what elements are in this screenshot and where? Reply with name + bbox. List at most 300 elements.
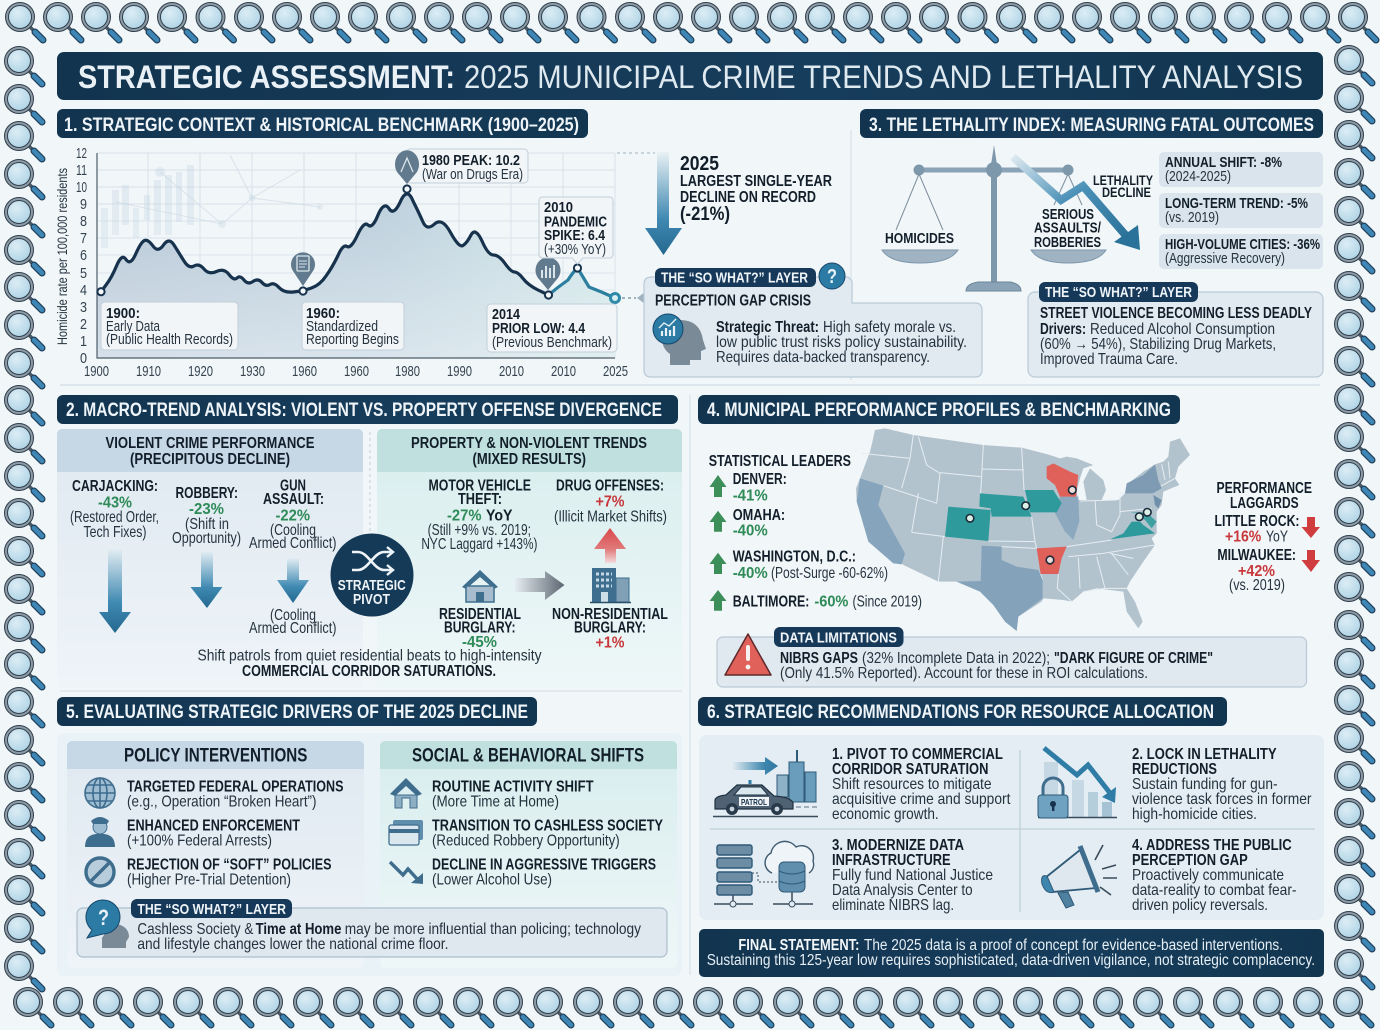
row: aggressive triggers: (Lower Alcohol Use) <box>432 872 552 888</box>
text: cashless insight: may be more influential than policing; technology <box>345 921 641 938</box>
icon: patrol car and city: PATROL <box>741 797 767 807</box>
robbery stat: Opportunity) <box>172 530 241 547</box>
panel: social and behavioral shifts: SOCIAL & BEHAVIORAL SHIFTS <box>412 744 644 766</box>
y-axis ticks: 10 <box>76 179 87 196</box>
motor vehicle theft stat: MOTOR VEHICLE <box>428 478 531 494</box>
heading: section 4 <box>698 395 1180 424</box>
y-axis ticks: 5 <box>80 265 87 282</box>
recommendation 4: driven policy reversals. <box>1132 897 1268 914</box>
pivot conclusion text: Shift patrols from quiet residential beats to high-intensity <box>198 648 542 664</box>
leader: Baltimore: (Since 2019) <box>852 594 922 610</box>
panel: property and non-violent trends: PROPERTY & NON-VIOLENT TRENDS <box>411 435 647 452</box>
non-residential burglary stat: +1% <box>596 634 624 652</box>
row: routine activity shift <box>390 778 594 810</box>
heading: section 1 <box>57 109 588 138</box>
carjacking stat: (Restored Order, <box>70 509 159 526</box>
callout: 1900: (Public Health Records) <box>106 332 233 348</box>
text: strategic threat: Requires data-backed transparency. <box>716 349 930 366</box>
text: strategic threat: High safety morale vs. <box>823 319 956 336</box>
text: cashless insight <box>137 921 641 953</box>
icon: head with question bubble: ? <box>98 905 109 930</box>
row: enhanced enforcement <box>85 817 300 850</box>
icon: 1960 report pin <box>291 252 315 286</box>
performance laggards list: LAGGARDS <box>1230 495 1299 512</box>
y-axis ticks: 12 <box>76 145 87 162</box>
section 2: macro-trend analysis <box>57 395 682 688</box>
heading: section 3 <box>860 109 1323 138</box>
laggard: Little Rock <box>1214 513 1320 546</box>
map: United States <box>856 428 1190 631</box>
section 3: lethality index <box>860 109 1323 377</box>
strategic pivot badge: PIVOT <box>353 591 390 608</box>
recommendation 2 <box>1038 746 1312 823</box>
performance laggards list <box>1214 480 1320 594</box>
callout: largest single-year decline: DECLINE ON RECORD <box>680 189 816 206</box>
scale labels: DECLINE <box>1102 185 1151 200</box>
residential burglary stat: -45% <box>462 634 497 651</box>
row: routine activity shift: ROUTINE ACTIVITY SHIFT <box>432 778 594 796</box>
callout: pandemic spike: SPIKE: 6.4 <box>544 228 605 244</box>
motor vehicle theft stat: THEFT: <box>458 491 502 508</box>
carjacking stat <box>70 478 159 541</box>
stat card: annual shift: (2024-2025) <box>1165 169 1231 185</box>
heading: perception gap crisis: PERCEPTION GAP CRISIS <box>655 292 811 310</box>
text: strategic threat <box>716 319 967 366</box>
panel: property and non-violent trends: (MIXED RESULTS) <box>472 451 586 468</box>
heading: section 2: 2. MACRO-TREND ANALYSIS: VIOLENT VS. PROPERTY OFFENSE DIVERGENCE <box>66 399 662 421</box>
final statement banner: Sustaining this 125-year low requires sophisticated, data-driven vigilance, not strategic complacency. <box>707 952 1315 969</box>
historical trend line <box>101 194 548 295</box>
panel: policy interventions <box>67 741 364 968</box>
text: NIBRS gaps: (32% Incomplete Data in 2022); <box>862 650 1050 667</box>
robbery stat <box>172 485 241 547</box>
callout: 1960: 1960: <box>306 306 340 322</box>
performance laggards list: PERFORMANCE <box>1216 480 1312 497</box>
recommendation 3 <box>714 837 993 914</box>
section dividers <box>60 130 1320 975</box>
text: drivers: Drivers: <box>1040 321 1086 338</box>
callout: 1960: Standardized <box>306 319 378 335</box>
recommendation 3: Fully fund National Justice <box>832 867 993 884</box>
stat card: high-volume cities <box>1159 234 1323 269</box>
final statement banner: The 2025 data is a proof of concept for evidence-based interventions. <box>864 937 1283 954</box>
recommendation 4: Proactively communicate <box>1132 867 1284 884</box>
recommendation 1: economic growth. <box>832 806 939 823</box>
tag: so what layer: THE “SO WHAT?” LAYER <box>137 901 286 918</box>
leader: Washington DC <box>710 548 888 582</box>
row: cashless society <box>389 818 663 850</box>
recent trend line <box>548 268 615 298</box>
row: routine activity shift: (More Time at Home) <box>432 794 559 810</box>
x-axis ticks: 2010 <box>551 363 576 380</box>
axes <box>97 153 615 358</box>
text: cashless insight: Cashless Society & <box>137 921 254 938</box>
callout: 1900 <box>101 302 238 350</box>
robbery stat: ROBBERY: <box>176 485 238 502</box>
section 5: evaluating strategic drivers <box>57 697 682 976</box>
callout: pandemic spike: (+30% YoY) <box>544 242 606 258</box>
callout: 1980 peak: 1980 PEAK: 10.2 <box>422 153 520 169</box>
scale labels: HOMICIDES <box>885 231 954 247</box>
recommendation 2: 2. LOCK IN LETHALITY <box>1132 746 1277 763</box>
gun assault note: Armed Conflict) <box>249 620 336 637</box>
recommendation 3: INFRASTRUCTURE <box>832 852 951 869</box>
gun assault stat: (Cooling <box>270 522 316 539</box>
map state: New York <box>1125 464 1162 493</box>
callout: pandemic spike: PANDEMIC <box>544 214 607 230</box>
y-axis ticks: 4 <box>80 282 87 299</box>
scale labels: SERIOUS <box>1042 207 1094 223</box>
panel: so-what perception gap <box>644 263 982 377</box>
row: targeted federal operations <box>85 778 344 810</box>
map state: Arkansas <box>1037 547 1067 574</box>
recommendation 3: 3. MODERNIZE DATA <box>832 837 964 854</box>
callout: largest single-year decline <box>680 153 832 225</box>
y-axis ticks: 9 <box>80 196 87 213</box>
row: rejection of soft policies <box>86 856 332 888</box>
laggard: Little Rock: +16% <box>1225 528 1261 546</box>
x-axis ticks: 1980 <box>395 363 420 380</box>
section 6: strategic recommendations <box>698 697 1324 977</box>
recommendation 4: data-reality to combat fear- <box>1132 882 1296 899</box>
x-axis ticks: 1910 <box>136 363 161 380</box>
drug offenses stat <box>554 478 667 526</box>
callout: 1960 <box>302 302 404 350</box>
leader: Omaha: OMAHA: <box>733 507 785 524</box>
stat card: long-term trend: (vs. 2019) <box>1165 210 1219 226</box>
panel: data limitations <box>717 627 1306 687</box>
y-axis ticks <box>76 145 87 367</box>
y-axis ticks: 7 <box>80 230 87 247</box>
stat card: long-term trend: LONG-TERM TREND: -5% <box>1165 195 1308 212</box>
row: enhanced enforcement: ENHANCED ENFORCEMENT <box>127 818 300 834</box>
gun assault stat: GUN <box>280 478 306 494</box>
x-axis ticks: 1960 <box>292 363 317 380</box>
map state: Nebraska <box>979 493 1032 517</box>
stat card: annual shift: ANNUAL SHIFT: -8% <box>1165 154 1282 171</box>
recommendation 1: CORRIDOR SATURATION <box>832 761 988 778</box>
panel: social and behavioral shifts <box>380 741 677 968</box>
drug offenses stat: DRUG OFFENSES: <box>556 478 664 494</box>
heading: section 6 <box>698 697 1227 726</box>
gun assault note <box>249 607 336 637</box>
x-axis ticks: 1990 <box>447 363 472 380</box>
non-residential burglary stat: BURGLARY: <box>574 620 646 636</box>
motor vehicle theft stat <box>421 478 537 553</box>
leader: Washington DC: WASHINGTON, D.C.: <box>733 548 856 566</box>
icon: padlock and decline chart <box>1038 748 1117 818</box>
callout: largest single-year decline: (-21%) <box>680 204 730 225</box>
row: cashless society: (Reduced Robbery Opportunity) <box>432 832 620 850</box>
row: aggressive triggers: DECLINE IN AGGRESSIVE TRIGGERS <box>432 856 656 874</box>
heading: section 4: 4. MUNICIPAL PERFORMANCE PROFILES & BENCHMARKING <box>707 399 1171 421</box>
line chart: homicide rate 1900–2025 <box>54 145 628 380</box>
arrow: drug offenses increase <box>594 528 626 563</box>
map state: California <box>857 478 905 564</box>
icon: balance scale <box>882 145 1106 291</box>
gun assault stat <box>249 478 336 552</box>
recommendation 3: eliminate NIBRS lag. <box>832 897 954 914</box>
text: drivers: Reduced Alcohol Consumption <box>1090 321 1275 338</box>
arrow: residential to non-residential <box>515 571 564 600</box>
callout: 1980 peak <box>406 149 528 183</box>
x-axis ticks: 1900 <box>84 363 109 380</box>
pivot conclusion text: COMMERCIAL CORRIDOR SATURATIONS. <box>242 663 496 680</box>
tag: so what layer: THE “SO WHAT?” LAYER <box>1045 284 1192 301</box>
carjacking stat: CARJACKING: <box>72 478 158 495</box>
icon: payment cards <box>389 820 423 845</box>
recommendation 4 <box>1042 837 1296 914</box>
y-axis ticks: 3 <box>80 299 87 316</box>
text: drivers <box>1040 305 1312 368</box>
recommendation 4: PERCEPTION GAP <box>1132 852 1248 869</box>
panel: policy interventions: POLICY INTERVENTIONS <box>124 744 307 766</box>
residential burglary stat <box>439 606 521 651</box>
residential burglary stat: RESIDENTIAL <box>439 606 521 623</box>
y-axis ticks: 0 <box>80 350 87 367</box>
final statement banner <box>699 929 1324 977</box>
recommendation 4: 4. ADDRESS THE PUBLIC <box>1132 837 1292 854</box>
text: cashless insight: and lifestyle changes lower the national crime floor. <box>137 936 448 953</box>
stat card: high-volume cities: (Aggressive Recovery) <box>1165 251 1285 267</box>
leader: Washington DC: (Post-Surge -60-62%) <box>771 565 888 582</box>
y-axis ticks: 6 <box>80 247 87 264</box>
map pins <box>966 486 1151 564</box>
icon: warning triangle <box>725 634 771 675</box>
icon: 1980 peak pin <box>395 150 419 184</box>
leader: Omaha <box>710 507 785 540</box>
text: NIBRS gaps <box>780 650 1213 682</box>
connector: chart end to perception gap <box>617 153 655 304</box>
statistical leaders list <box>709 453 922 611</box>
drug offenses stat: (Illicit Market Shifts) <box>554 508 667 526</box>
leader: Baltimore: BALTIMORE: <box>733 594 809 610</box>
icon: decline arrow <box>390 862 423 884</box>
row: rejection of soft policies: (Higher Pre-Trial Detention) <box>127 872 291 888</box>
map state: Colorado <box>945 507 991 541</box>
callout: 2014 prior low: 2014 <box>492 307 520 323</box>
stat card: high-volume cities: HIGH-VOLUME CITIES: -36% <box>1165 236 1320 253</box>
statistical leaders list: STATISTICAL LEADERS <box>709 453 851 470</box>
scale labels <box>885 173 1153 251</box>
x-axis ticks <box>84 363 628 380</box>
heading: section 5: 5. EVALUATING STRATEGIC DRIVERS OF THE 2025 DECLINE <box>66 701 528 723</box>
dashed divider <box>369 432 371 535</box>
recommendation 3: Data Analysis Center to <box>832 882 973 899</box>
callout: 1980 peak: (War on Drugs Era) <box>422 167 523 183</box>
scale labels: ASSAULTS/ <box>1034 220 1101 236</box>
text: NIBRS gaps: NIBRS GAPS <box>780 650 858 667</box>
panel: violent crime performance: VIOLENT CRIME PERFORMANCE <box>106 435 315 452</box>
panel: so-what street violence <box>1028 282 1323 377</box>
motor vehicle theft stat: (Still +9% vs. 2019; <box>428 522 531 539</box>
icon: question bubble <box>819 263 845 289</box>
tag: data limitations: DATA LIMITATIONS <box>780 630 897 646</box>
robbery stat: (Shift in <box>185 516 229 533</box>
stat card: long-term trend <box>1159 193 1323 228</box>
laggard: Milwaukee <box>1217 547 1320 594</box>
scale labels: ROBBERIES <box>1034 235 1101 251</box>
map state: Wisconsin <box>1047 463 1078 497</box>
x-axis ticks: 2010 <box>499 363 524 380</box>
map state: Texas <box>957 546 1043 631</box>
motor vehicle theft stat: -27% <box>447 508 482 524</box>
panel: property and non-violent trends <box>377 429 682 688</box>
map state: Iowa <box>1025 490 1062 512</box>
motor vehicle theft stat: YoY <box>486 508 513 524</box>
text: cashless insight: Time at Home <box>256 921 341 938</box>
data point markers <box>97 185 619 302</box>
gun assault note: (Cooling <box>270 607 316 624</box>
recommendation 1: Shift resources to mitigate <box>832 776 992 793</box>
text: NIBRS gaps: "DARK FIGURE OF CRIME" <box>1054 650 1213 667</box>
recommendation 2: high-homicide cities. <box>1132 806 1257 823</box>
recommendation 1: 1. PIVOT TO COMMERCIAL <box>832 746 1003 763</box>
stat card: annual shift <box>1159 152 1323 187</box>
heading: section 6: 6. STRATEGIC RECOMMENDATIONS FOR RESOURCE ALLOCATION <box>707 701 1214 723</box>
recommendation 1 <box>713 746 1011 823</box>
tag: so what layer: THE “SO WHAT?” LAYER <box>661 270 808 286</box>
recommendation 2: Sustain funding for gun- <box>1132 776 1278 793</box>
map state: Illinois <box>1055 497 1079 540</box>
map state: New Jersey <box>1153 495 1162 508</box>
map state: Virginia <box>1110 522 1155 539</box>
text: strategic threat: low public trust risks policy sustainability. <box>716 334 967 351</box>
text: drivers: Improved Trauma Care. <box>1040 351 1178 368</box>
final statement banner: FINAL STATEMENT: <box>738 937 859 954</box>
icon: globe <box>85 778 115 808</box>
x-axis ticks: 2025 <box>603 363 628 380</box>
x-axis ticks: 1920 <box>188 363 213 380</box>
callout: pandemic spike: 2010 <box>544 200 573 216</box>
drug offenses stat: +7% <box>596 494 624 510</box>
icon: megaphone <box>1042 845 1117 908</box>
arrow: robbery decline <box>190 550 222 608</box>
laggard: Milwaukee: MILWAUKEE: <box>1217 547 1296 564</box>
icon: house <box>462 570 498 602</box>
heading: section 1: 1. STRATEGIC CONTEXT & HISTORICAL BENCHMARK (1900–2025) <box>64 114 579 136</box>
heading: section 2 <box>57 395 678 424</box>
map state: Maryland <box>1130 512 1157 528</box>
recommendation 2: violence task forces in former <box>1132 791 1312 808</box>
carjacking stat: -43% <box>98 494 132 512</box>
callout: 2014 prior low <box>487 304 617 352</box>
gun assault stat: -22% <box>276 508 310 524</box>
icon: head with question bubble <box>86 900 129 948</box>
row: enhanced enforcement: (+100% Federal Arrests) <box>127 832 272 850</box>
laggard: Little Rock: YoY <box>1266 528 1288 546</box>
callout: 1960: Reporting Begins <box>306 332 399 348</box>
row: targeted federal operations: TARGETED FEDERAL OPERATIONS <box>127 778 344 796</box>
section 1: strategic context and historical benchmark <box>54 109 982 380</box>
panel: violent crime performance <box>57 429 363 688</box>
robbery stat: -23% <box>189 501 224 518</box>
callout: largest single-year decline: 2025 <box>680 153 719 175</box>
gun assault stat: Armed Conflict) <box>249 535 336 552</box>
leader: Denver: -41% <box>733 488 768 504</box>
text: NIBRS gaps: (Only 41.5% Reported). Account for these in ROI calculations. <box>780 665 1148 682</box>
y-axis ticks: 11 <box>76 162 87 179</box>
scale labels: LETHALITY <box>1093 173 1153 188</box>
pivot conclusion text <box>198 648 542 680</box>
carjacking stat: Tech Fixes) <box>84 524 146 541</box>
section 5 background panel <box>57 733 682 976</box>
text: drivers: (60% → 54%), Stabilizing Drug Markets, <box>1040 336 1276 353</box>
grid dividers <box>710 750 1315 912</box>
icon: prohibition sign <box>86 858 114 886</box>
laggard: Milwaukee: (vs. 2019) <box>1229 577 1285 594</box>
panel: recommendations grid <box>699 735 1324 920</box>
arrow: carjacking decline <box>99 547 131 633</box>
panel: violent crime performance: (PRECIPITOUS DECLINE) <box>130 451 290 468</box>
heading: section 5 <box>57 697 537 726</box>
callout: pandemic spike <box>539 197 613 264</box>
residential burglary stat: BURGLARY: <box>444 620 516 636</box>
callout: 1900: 1900: <box>106 306 140 322</box>
panel: so-what policing insight <box>77 899 667 957</box>
recommendation 2: REDUCTIONS <box>1132 761 1217 778</box>
row: aggressive triggers <box>390 856 656 888</box>
y-axis ticks: 8 <box>80 213 87 230</box>
x-axis ticks: 1960 <box>344 363 369 380</box>
row: cashless society: TRANSITION TO CASHLESS SOCIETY <box>432 818 663 834</box>
text: strategic threat: Strategic Threat: <box>716 319 819 336</box>
arrow: lethality decline <box>1013 157 1140 250</box>
motor vehicle theft stat: NYC Laggard +143%) <box>421 536 537 553</box>
title banner: STRATEGIC ASSESSMENT: <box>78 59 455 95</box>
laggard: Little Rock: LITTLE ROCK: <box>1214 513 1300 530</box>
leader: Washington DC: -40% <box>733 565 768 582</box>
arrow: gun assault decline <box>277 557 309 603</box>
icon: question bubble: ? <box>827 266 837 288</box>
icon: officer <box>85 817 115 847</box>
laggard: Milwaukee: +42% <box>1238 563 1275 580</box>
leader: Denver <box>710 471 787 504</box>
title banner <box>57 52 1323 100</box>
icon: servers and cloud database <box>714 841 814 907</box>
y-axis ticks: 2 <box>80 316 87 333</box>
leader: Omaha: -40% <box>733 522 768 540</box>
row: rejection of soft policies: REJECTION OF “SOFT” POLICIES <box>127 856 332 874</box>
y-axis ticks: 1 <box>80 333 87 350</box>
area under curve <box>97 194 615 358</box>
x-axis ticks: 1930 <box>240 363 265 380</box>
y-axis title: Homicide rate per 100,000 residents <box>54 168 70 345</box>
callout: 1900: Early Data <box>106 319 161 335</box>
leader: Baltimore: -60% <box>814 594 848 610</box>
callout: 2014 prior low: PRIOR LOW: 4.4 <box>492 321 585 337</box>
non-residential burglary stat: NON-RESIDENTIAL <box>552 606 668 623</box>
icon: head with chart bubble <box>653 314 706 365</box>
leader: Denver: DENVER: <box>733 471 787 488</box>
leader: Baltimore <box>710 590 922 611</box>
gun assault stat: ASSAULT: <box>263 491 324 508</box>
icon: home <box>390 778 422 808</box>
strategic pivot badge <box>330 534 414 616</box>
icon: patrol car and city <box>713 750 818 816</box>
row: targeted federal operations: (e.g., Operation “Broken Heart”) <box>127 794 316 810</box>
icon: commercial building <box>590 568 631 602</box>
recommendation 1: acquisitive crime and support <box>832 791 1011 808</box>
strategic pivot badge: STRATEGIC <box>338 577 406 594</box>
title banner: 2025 MUNICIPAL CRIME TRENDS AND LETHALITY ANALYSIS <box>464 59 1303 95</box>
icon: 2014 data pin <box>536 257 560 290</box>
arrow: 2025 decline <box>645 152 682 255</box>
callout: largest single-year decline: LARGEST SINGLE-YEAR <box>680 173 832 190</box>
callout: 2014 prior low: (Previous Benchmark) <box>492 335 612 351</box>
section 4: municipal performance profiles <box>698 395 1320 687</box>
non-residential burglary stat <box>552 606 668 652</box>
